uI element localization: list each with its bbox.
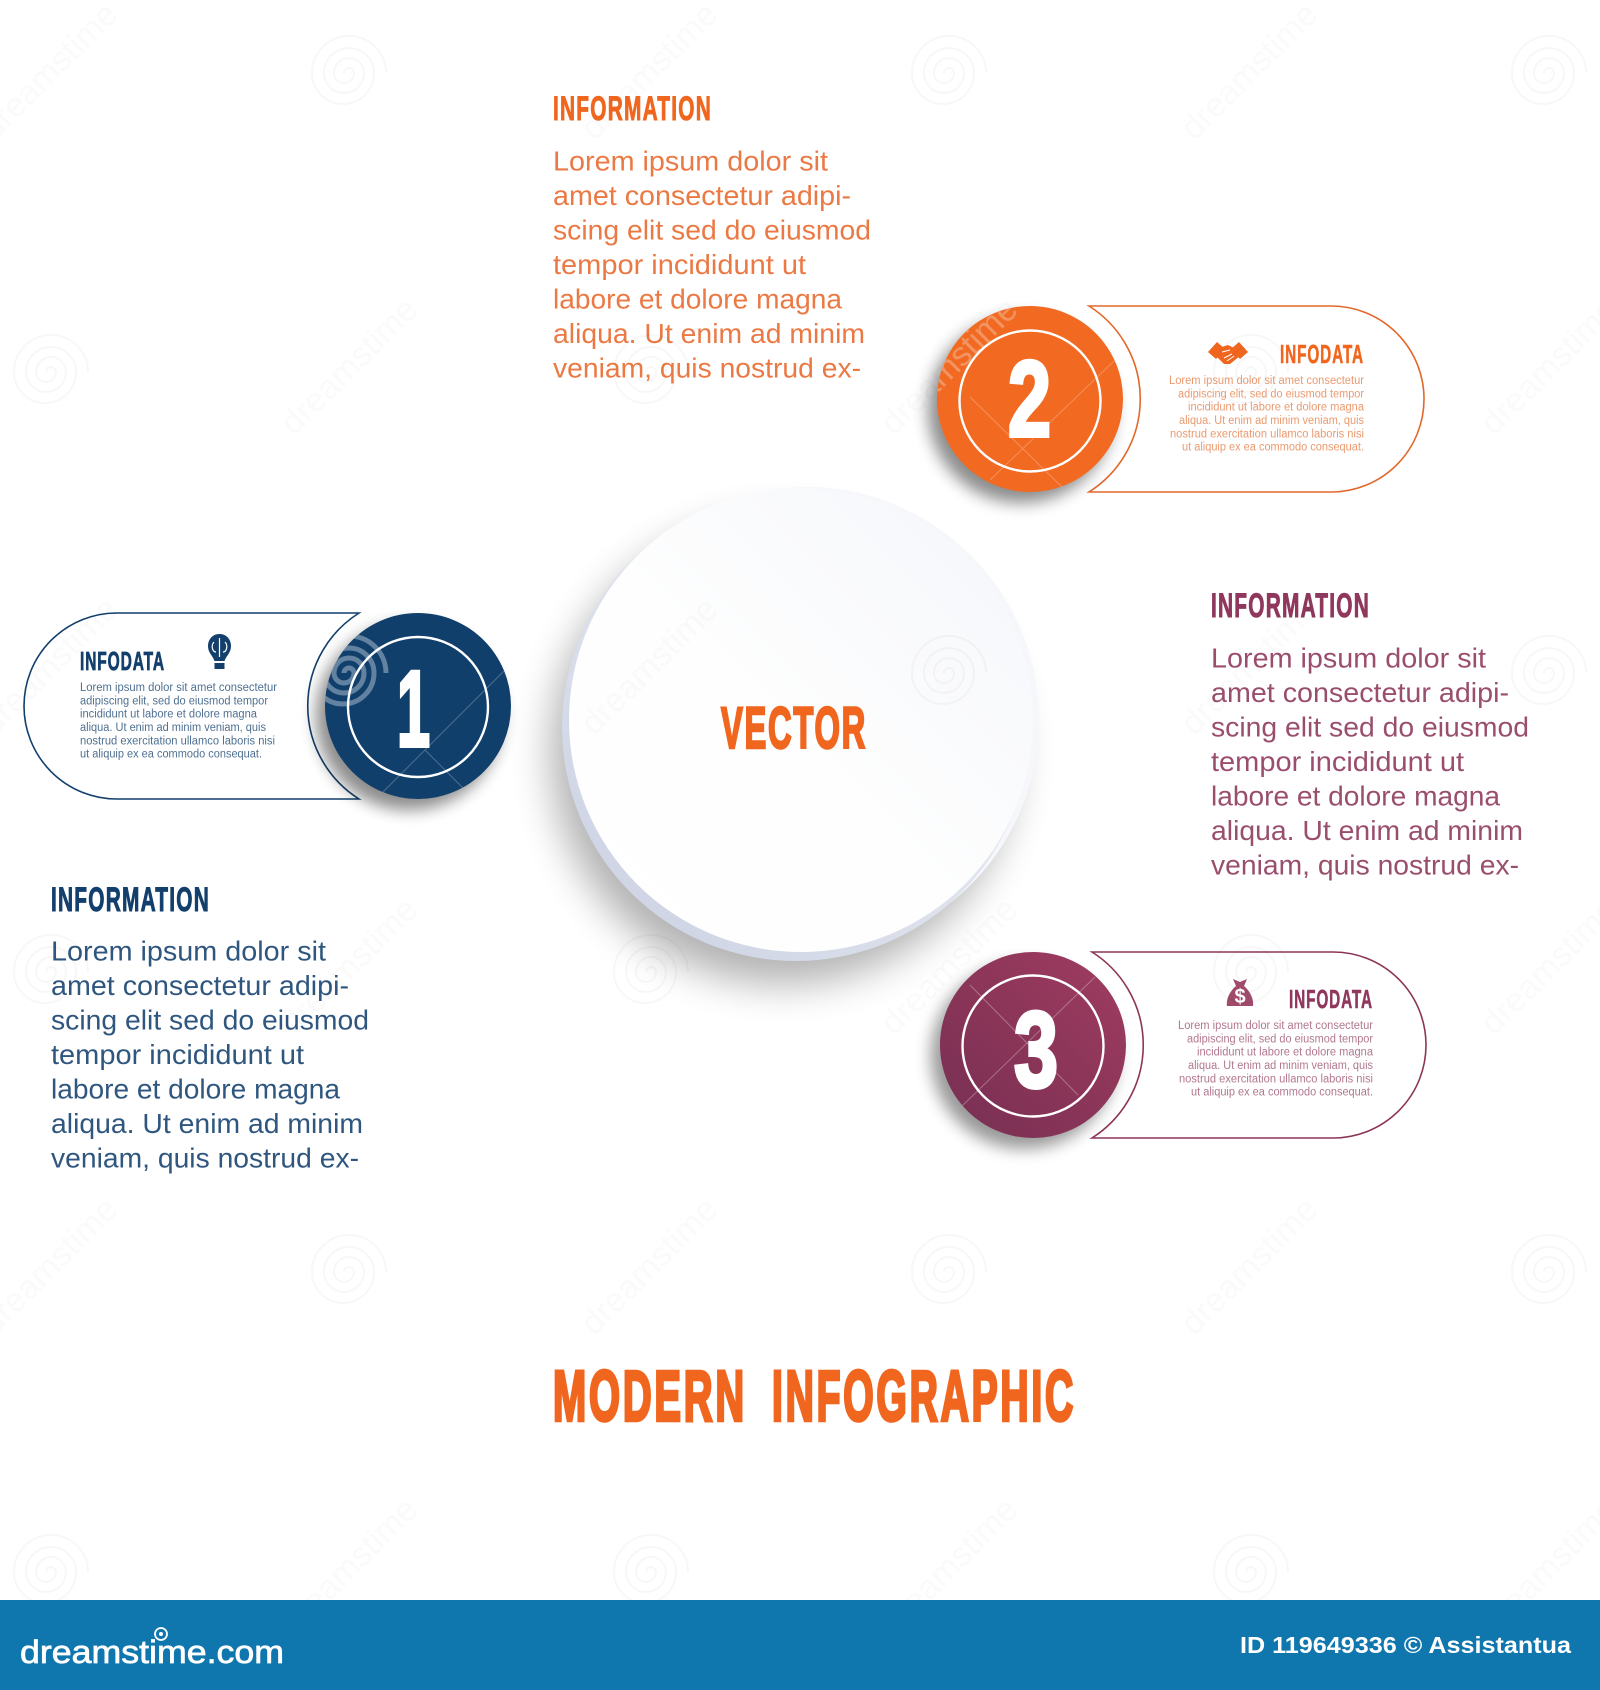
watermark pattern: dreamstime: [273, 1490, 425, 1642]
icon: money bag: $: [1234, 986, 1246, 1008]
badge 2: [918, 306, 1124, 514]
title: INFOGRAPHIC: [772, 1358, 1076, 1436]
paragraph: aliqua. Ut enim ad minim: [553, 318, 865, 349]
badge 2: 2: [1008, 338, 1051, 459]
body text 1: incididunt ut labore et dolore magna: [80, 709, 258, 721]
footer credit: ID 119649336 © Assistantua: [1240, 1632, 1571, 1658]
heading: INFORMATION: [553, 90, 712, 128]
paragraph: amet consectetur adipi-: [51, 970, 349, 1001]
footer logo: dreamstime.com: [20, 1634, 284, 1670]
paragraph: [553, 146, 871, 384]
paragraph: scing elit sed do eiusmod: [51, 1005, 369, 1036]
body text 2: nostrud exercitation ullamco laboris nisi: [1170, 428, 1364, 440]
paragraph: Lorem ipsum dolor sit: [553, 146, 828, 177]
watermark pattern: dreamstime: [273, 290, 425, 442]
pill outline 3: [1092, 952, 1426, 1138]
body text 2: incididunt ut labore et dolore magna: [1188, 402, 1365, 414]
body text 3: [1178, 1020, 1374, 1099]
watermark pattern: dreamstime: [573, 590, 725, 742]
paragraph: veniam, quis nostrud ex-: [51, 1143, 359, 1174]
paragraph: scing elit sed do eiusmod: [1211, 711, 1529, 742]
body text 1: ut aliquip ex ea commodo consequat.: [80, 749, 262, 761]
pill outline 2: [1089, 306, 1424, 492]
paragraph: aliqua. Ut enim ad minim: [1211, 815, 1523, 846]
watermark pattern: dreamstime: [573, 1190, 725, 1342]
paragraph: tempor incididunt ut: [51, 1039, 304, 1070]
paragraph: veniam, quis nostrud ex-: [553, 353, 861, 384]
body text 2: aliqua. Ut enim ad minim veniam, quis: [1179, 415, 1364, 427]
icon: handshake: [1208, 342, 1248, 364]
watermark pattern: dreamstime: [273, 890, 425, 1042]
information block: navy: [51, 881, 369, 1174]
paragraph: aliqua. Ut enim ad minim: [51, 1108, 363, 1139]
badge 1: [312, 613, 511, 810]
watermark pattern: dreamstime: [1173, 1190, 1325, 1342]
body text 2: adipiscing elit, sed do eiusmod tempor: [1178, 388, 1364, 400]
heading: INFORMATION: [1211, 587, 1370, 625]
pill outline 1: [24, 613, 359, 799]
step 1: navy pill: [24, 613, 511, 810]
icon: brain bulb: [208, 634, 231, 669]
badge 3: [931, 952, 1126, 1149]
paragraph: amet consectetur adipi-: [553, 180, 851, 211]
step 2: orange pill: [873, 290, 1424, 503]
body text 2: Lorem ipsum dolor sit amet consectetur: [1169, 375, 1364, 387]
badge 3: 3: [1014, 989, 1058, 1110]
body text 2: ut aliquip ex ea commodo consequat.: [1182, 442, 1364, 454]
paragraph: scing elit sed do eiusmod: [553, 215, 871, 246]
paragraph: tempor incididunt ut: [553, 249, 806, 280]
body text 1: aliqua. Ut enim ad minim veniam, quis: [80, 722, 266, 734]
paragraph: labore et dolore magna: [1211, 780, 1501, 811]
badge 2: dreamstime: [873, 290, 1025, 442]
paragraph: Lorem ipsum dolor sit: [1211, 642, 1486, 673]
body text 3: adipiscing elit, sed do eiusmod tempor: [1187, 1033, 1373, 1045]
title: [553, 1358, 1076, 1436]
heading: infodata 3: INFODATA: [1289, 984, 1373, 1014]
title: MODERN: [553, 1358, 747, 1436]
icon: money bag: [1227, 979, 1253, 1008]
body text 1: [80, 682, 277, 761]
center label: VECTOR: [721, 696, 867, 761]
footer bar: [0, 1600, 1600, 1690]
paragraph: [51, 936, 369, 1174]
heading: infodata 2: INFODATA: [1280, 339, 1364, 369]
body text 3: nostrud exercitation ullamco laboris nisi: [1179, 1073, 1373, 1085]
body text 1: Lorem ipsum dolor sit amet consectetur: [80, 682, 277, 694]
central circle: [551, 487, 1039, 984]
body text 1: nostrud exercitation ullamco laboris nisi: [80, 735, 275, 747]
body text 2: [1169, 375, 1365, 454]
watermark pattern: dreamstime: [1173, 590, 1325, 742]
badge 1: 1: [397, 648, 430, 769]
heading: INFORMATION: [51, 881, 210, 919]
heading: infodata 1: INFODATA: [80, 646, 165, 676]
paragraph: labore et dolore magna: [553, 284, 843, 315]
paragraph: amet consectetur adipi-: [1211, 677, 1509, 708]
paragraph: tempor incididunt ut: [1211, 746, 1464, 777]
paragraph: Lorem ipsum dolor sit: [51, 936, 326, 967]
watermark pattern: dreamstime: [873, 290, 1025, 442]
body text 3: aliqua. Ut enim ad minim veniam, quis: [1188, 1060, 1373, 1072]
paragraph: labore et dolore magna: [51, 1074, 341, 1105]
body text 3: ut aliquip ex ea commodo consequat.: [1191, 1087, 1373, 1099]
paragraph: veniam, quis nostrud ex-: [1211, 849, 1519, 880]
information block: orange: [553, 90, 871, 384]
watermark pattern: dreamstime: [873, 890, 1025, 1042]
watermark pattern: dreamstime: [873, 1490, 1025, 1642]
body text 1: adipiscing elit, sed do eiusmod tempor: [80, 695, 268, 707]
body text 3: Lorem ipsum dolor sit amet consectetur: [1178, 1020, 1373, 1032]
information block: plum: [1211, 587, 1529, 880]
paragraph: [1211, 642, 1529, 880]
body text 3: incididunt ut labore et dolore magna: [1197, 1047, 1374, 1059]
step 3: plum pill: [931, 952, 1426, 1149]
